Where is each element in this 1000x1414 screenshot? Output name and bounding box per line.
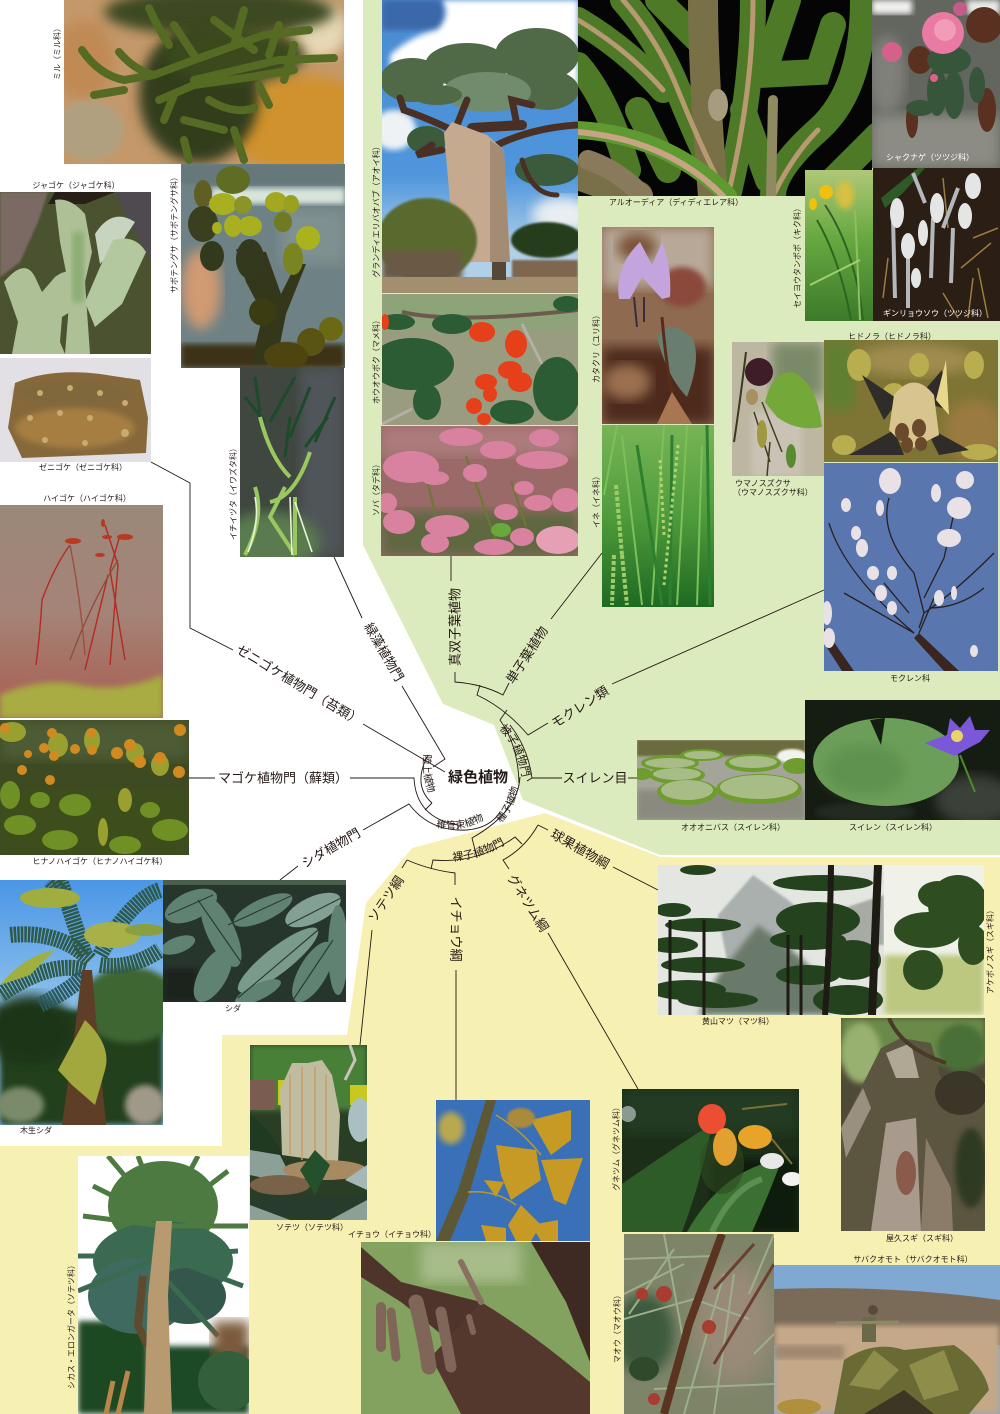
caption: アケボノスギ: アケボノスギ（スギ科） bbox=[985, 906, 995, 994]
caption: サバクオモト: サバクオモト（サバクオモト科） bbox=[853, 1254, 973, 1264]
caption: ヒドノラ: ヒドノラ（ヒドノラ科） bbox=[848, 331, 936, 341]
caption: グランディエリバオバブ: グランディエリバオバブ（アオイ科） bbox=[371, 142, 381, 278]
caption: 黄山マツ: 黄山マツ（マツ科） bbox=[702, 1016, 774, 1026]
photo: モクレン bbox=[824, 463, 998, 671]
label: ゼニゴケ植物門（苔類）: ゼニゴケ植物門（苔類） bbox=[234, 642, 364, 728]
panel: gymnosperm background bbox=[0, 813, 1000, 1414]
label: マゴケ植物門（蘚類）: マゴケ植物門（蘚類） bbox=[218, 770, 348, 786]
label: イチョウ綱: イチョウ綱 bbox=[448, 896, 464, 962]
photo: アルオーディア bbox=[578, 0, 872, 196]
caption: マオウ: マオウ（マオウ科） bbox=[612, 1291, 622, 1363]
caption: ハイゴケ: ハイゴケ（ハイゴケ科） bbox=[43, 493, 131, 503]
photo: ギンリョウソウ bbox=[873, 168, 1000, 321]
photo: ゼニゴケ bbox=[0, 358, 151, 462]
caption: イチョウ: イチョウ（イチョウ科） bbox=[348, 1229, 436, 1239]
label: 種子植物: 種子植物 bbox=[496, 786, 518, 822]
caption: ソテツ: ソテツ（ソテツ科） bbox=[276, 1222, 348, 1232]
caption: 木生シダ: 木生シダ bbox=[20, 1125, 52, 1135]
photo: イチイヅタ bbox=[240, 367, 344, 557]
label: 裸子植物門: 裸子植物門 bbox=[452, 837, 504, 862]
photo: ヒナノハイゴケ bbox=[0, 720, 189, 855]
photo: サボテングサ bbox=[181, 164, 345, 368]
caption: 屋久スギ: 屋久スギ（スギ科） bbox=[886, 1233, 958, 1243]
photo: ミル bbox=[64, 0, 344, 164]
caption: イネ: イネ（イネ科） bbox=[591, 472, 601, 528]
panel: angiosperm background bbox=[363, 0, 1000, 855]
caption: オオオニバス: オオオニバス（スイレン科） bbox=[681, 822, 785, 832]
label: 球果植物綱: 球果植物綱 bbox=[548, 826, 612, 872]
caption: ウマノスズクサ: （ウマノスズクサ科） bbox=[733, 487, 813, 497]
photo: シャクナゲ bbox=[872, 0, 1000, 168]
label: シダ植物門: シダ植物門 bbox=[299, 825, 363, 871]
caption: シカス・エロンガータ: シカス・エロンガータ（ソテツ科） bbox=[66, 1261, 76, 1389]
caption: ウマノスズクサ: ウマノスズクサ bbox=[735, 479, 791, 488]
label: 被子植物門: 被子植物門 bbox=[500, 724, 531, 776]
photo: イネ bbox=[602, 425, 714, 607]
label: スイレン目: スイレン目 bbox=[562, 770, 628, 786]
label: 緑藻植物門: 緑藻植物門 bbox=[361, 620, 407, 684]
heading: 緑色植物: 緑色植物 bbox=[448, 768, 508, 786]
branch lines: angiosperms bbox=[451, 553, 824, 783]
photo: スイレン bbox=[805, 700, 1000, 820]
caption: グネツム: グネツム（グネツム科） bbox=[611, 1103, 621, 1191]
photo: 木生シダ bbox=[0, 880, 163, 1125]
branch lines: gymnosperms bbox=[360, 777, 658, 1100]
photo: オオオニバス bbox=[637, 740, 805, 820]
caption: セイヨウタンポポ: セイヨウタンポポ（キク科） bbox=[792, 204, 802, 308]
photo: ソバ bbox=[381, 426, 578, 556]
photo: イチョウ大木 bbox=[361, 1242, 590, 1414]
label: 単子葉植物: 単子葉植物 bbox=[503, 624, 551, 686]
photo: 黄山マツ bbox=[658, 865, 984, 1015]
label: グネツム綱: グネツム綱 bbox=[504, 872, 552, 934]
label: モクレン類: モクレン類 bbox=[549, 683, 611, 731]
photo: ホウオウボク bbox=[382, 294, 578, 425]
caption: ギンリョウソウ: ギンリョウソウ（ツツジ科） bbox=[883, 308, 987, 318]
photo: ウマノスズクサ bbox=[732, 342, 824, 476]
caption: モクレン科: モクレン科 bbox=[890, 673, 930, 683]
label: 真双子葉植物: 真双子葉植物 bbox=[448, 588, 462, 666]
photo: マオウ bbox=[624, 1234, 774, 1414]
caption: ゼニゴケ: ゼニゴケ（ゼニゴケ科） bbox=[39, 462, 127, 472]
caption: スイレン: スイレン（スイレン科） bbox=[849, 822, 937, 832]
caption: ホウオウボク: ホウオウボク（マメ科） bbox=[371, 316, 381, 404]
tree of green plant phyla bbox=[151, 462, 824, 1100]
caption: ジャゴケ: ジャゴケ（ジャゴケ科） bbox=[32, 180, 120, 190]
photo: サバクオモト bbox=[774, 1265, 1000, 1414]
photo: ハイゴケ bbox=[0, 505, 163, 718]
photo: シカス・エロンガータ bbox=[78, 1156, 249, 1414]
label: ソテツ綱: ソテツ綱 bbox=[365, 873, 407, 925]
caption: イチイヅタ: イチイヅタ（イワズタ科） bbox=[228, 444, 238, 540]
label: 陸上植物: 陸上植物 bbox=[422, 754, 436, 792]
caption: ミル: ミル（ミル科） bbox=[52, 24, 62, 80]
photo: グネツム bbox=[622, 1089, 799, 1232]
photo: セイヨウタンポポ bbox=[805, 170, 873, 321]
photo: グランディエリバオバブ bbox=[382, 0, 578, 293]
caption: カタクリ: カタクリ（ユリ科） bbox=[591, 311, 601, 383]
photo: 屋久スギ bbox=[841, 1018, 985, 1231]
caption: ヒナノハイゴケ: ヒナノハイゴケ（ヒナノハイゴケ科） bbox=[33, 856, 167, 866]
label: 維管束植物: 維管束植物 bbox=[436, 814, 484, 830]
photo: シダ bbox=[163, 880, 346, 1002]
photo: イチョウ bbox=[436, 1100, 590, 1241]
photo: カタクリ bbox=[602, 227, 714, 424]
caption: シャクナゲ: シャクナゲ（ツツジ科） bbox=[886, 152, 974, 162]
caption: サボテングサ: サボテングサ（サボテングサ科） bbox=[169, 173, 179, 293]
caption: アルオーディア: アルオーディア（ディディエレア科） bbox=[609, 197, 743, 207]
photo: ジャゴケ bbox=[0, 192, 151, 354]
branch lines: bryophytes, algae, ferns bbox=[151, 462, 500, 880]
photo: ヒドノラ bbox=[824, 340, 998, 462]
photo: ソテツ bbox=[250, 1045, 367, 1220]
caption: シダ: シダ bbox=[225, 1003, 241, 1013]
caption: ソバ: ソバ（タデ科） bbox=[371, 460, 381, 516]
